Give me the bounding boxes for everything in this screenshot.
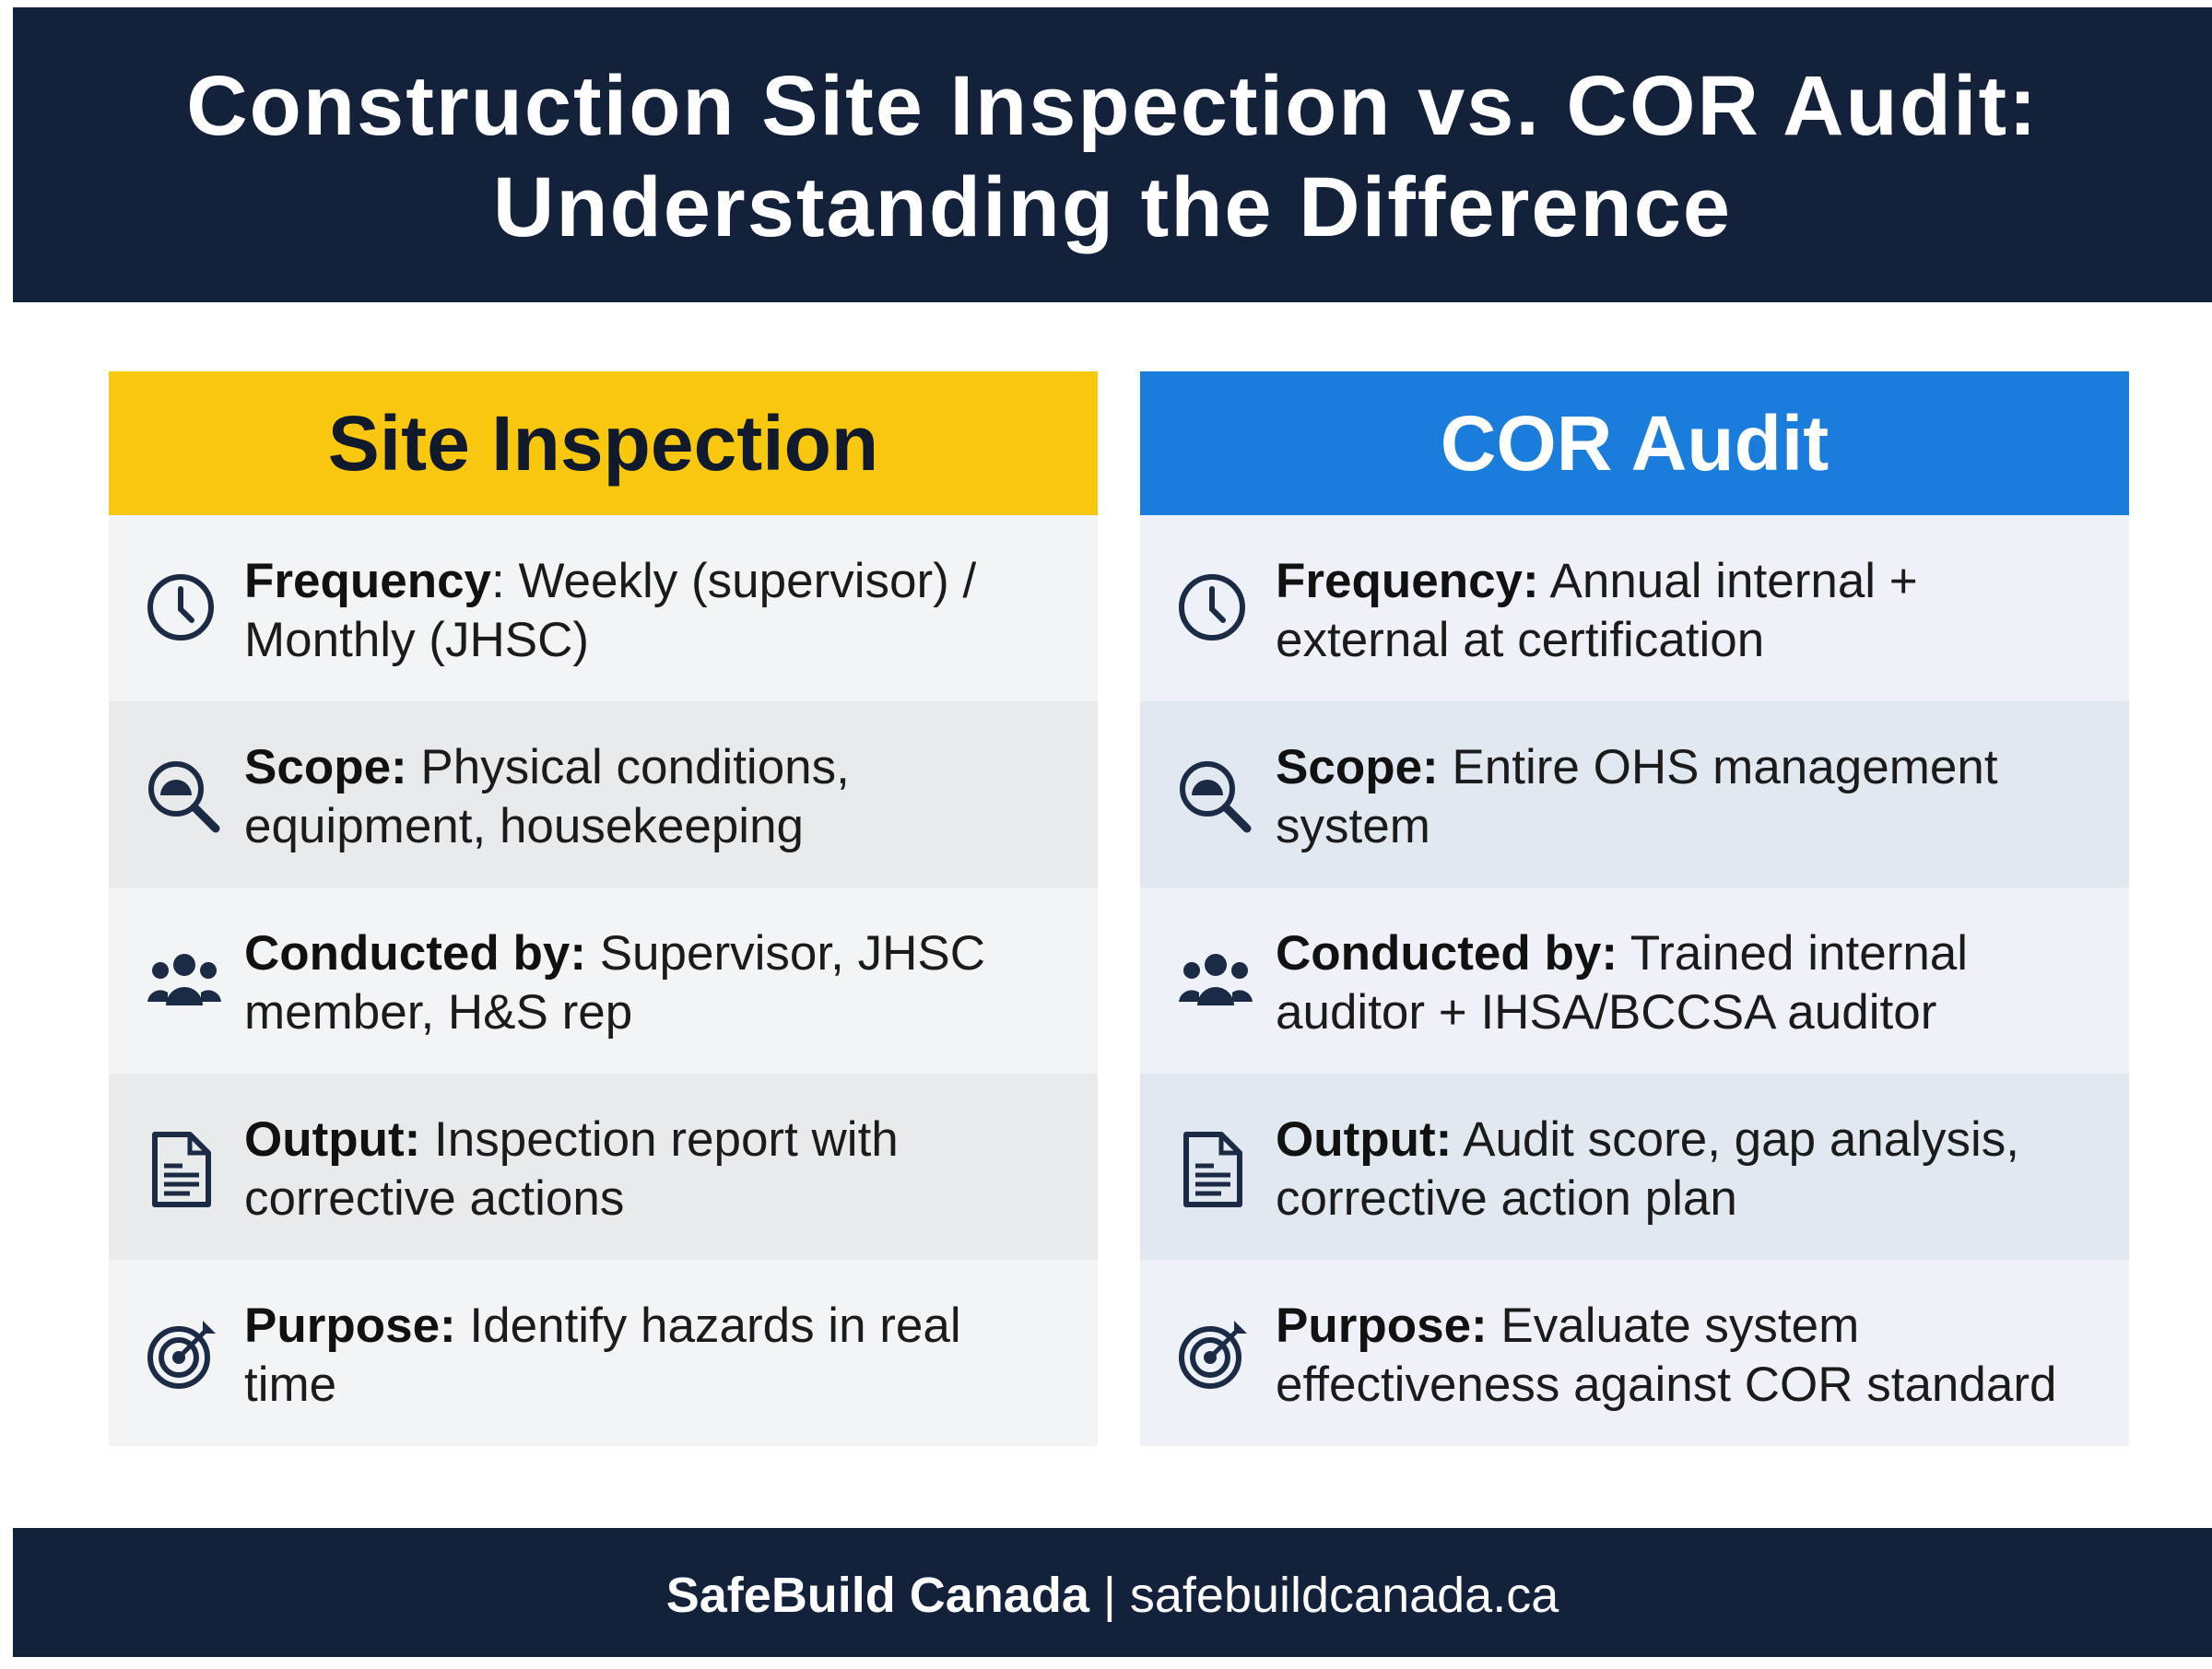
text: conducted by <box>244 926 985 1040</box>
row: purpose <box>109 1260 1098 1446</box>
text: conducted by: Conducted by: Supervisor, JHSC <box>244 926 985 981</box>
text: purpose <box>244 1299 961 1412</box>
text: frequency: external at certification <box>1276 613 1764 667</box>
heading: cor audit: COR Audit <box>1441 400 1829 487</box>
text: purpose: effectiveness against COR standard <box>1276 1358 2056 1412</box>
text: frequency <box>1276 554 1918 667</box>
text: conducted by <box>1276 926 1968 1040</box>
text: conducted by: Conducted by: Trained internal <box>1276 926 1968 981</box>
text: scope <box>244 740 850 853</box>
row: frequency <box>1140 515 2129 701</box>
footer: SafeBuild Canada | safebuildcanada.ca <box>666 1568 1559 1623</box>
title: Understanding the Difference <box>493 160 1732 254</box>
text: output: Output: Audit score, gap analysis, <box>1276 1112 2019 1167</box>
row: output <box>109 1074 1098 1260</box>
text: scope: system <box>1276 799 1430 853</box>
text: output: Output: Inspection report with <box>244 1112 899 1167</box>
text: scope <box>1276 740 1998 853</box>
heading: site inspection: Site Inspection <box>328 400 878 487</box>
row: output <box>1140 1074 2129 1260</box>
icon: people <box>147 954 221 1005</box>
text: purpose: Purpose: Identify hazards in real <box>244 1299 961 1353</box>
icon: target <box>1179 1321 1247 1389</box>
row: conducted by <box>109 887 1098 1074</box>
icon: clock <box>1179 574 1245 641</box>
footer <box>13 1528 2212 1657</box>
text: conducted by: auditor + IHSA/BCCSA auditor <box>1276 985 1936 1040</box>
text: output <box>1276 1112 2019 1226</box>
text: output <box>244 1112 899 1226</box>
text: frequency: Frequency: Annual internal + <box>1276 554 1918 608</box>
title: Construction Site Inspection vs. COR Audit: <box>186 59 2039 153</box>
text: scope: Scope: Physical conditions, <box>244 740 850 794</box>
text: frequency: Frequency: Weekly (supervisor) / <box>244 554 976 608</box>
icon: document <box>1183 1132 1242 1207</box>
text: scope: equipment, housekeeping <box>244 799 804 853</box>
icon: target <box>147 1321 216 1389</box>
text: purpose <box>1276 1299 2056 1412</box>
icon: people <box>1179 954 1253 1005</box>
title <box>13 7 2212 302</box>
row: scope <box>1140 701 2129 887</box>
text: output: corrective action plan <box>1276 1171 1737 1226</box>
row: purpose <box>1140 1260 2129 1446</box>
icon: document <box>152 1132 211 1207</box>
heading: cor audit <box>1140 371 2129 515</box>
row: scope <box>109 701 1098 887</box>
panel: site inspection <box>109 371 1098 1446</box>
panel: cor audit <box>1140 371 2129 1446</box>
heading: site inspection <box>109 371 1098 515</box>
icon: magnifier <box>148 761 219 833</box>
text: frequency: Monthly (JHSC) <box>244 613 589 667</box>
text: purpose: Purpose: Evaluate system <box>1276 1299 1859 1353</box>
icon: clock <box>147 574 214 641</box>
text: output: corrective actions <box>244 1171 624 1226</box>
text: frequency <box>244 554 977 667</box>
text: scope: Scope: Entire OHS management <box>1276 740 1998 794</box>
row: frequency <box>109 515 1098 701</box>
row: conducted by <box>1140 887 2129 1074</box>
text: conducted by: member, H&S rep <box>244 985 632 1040</box>
text: purpose: time <box>244 1358 336 1412</box>
icon: magnifier <box>1180 761 1252 833</box>
